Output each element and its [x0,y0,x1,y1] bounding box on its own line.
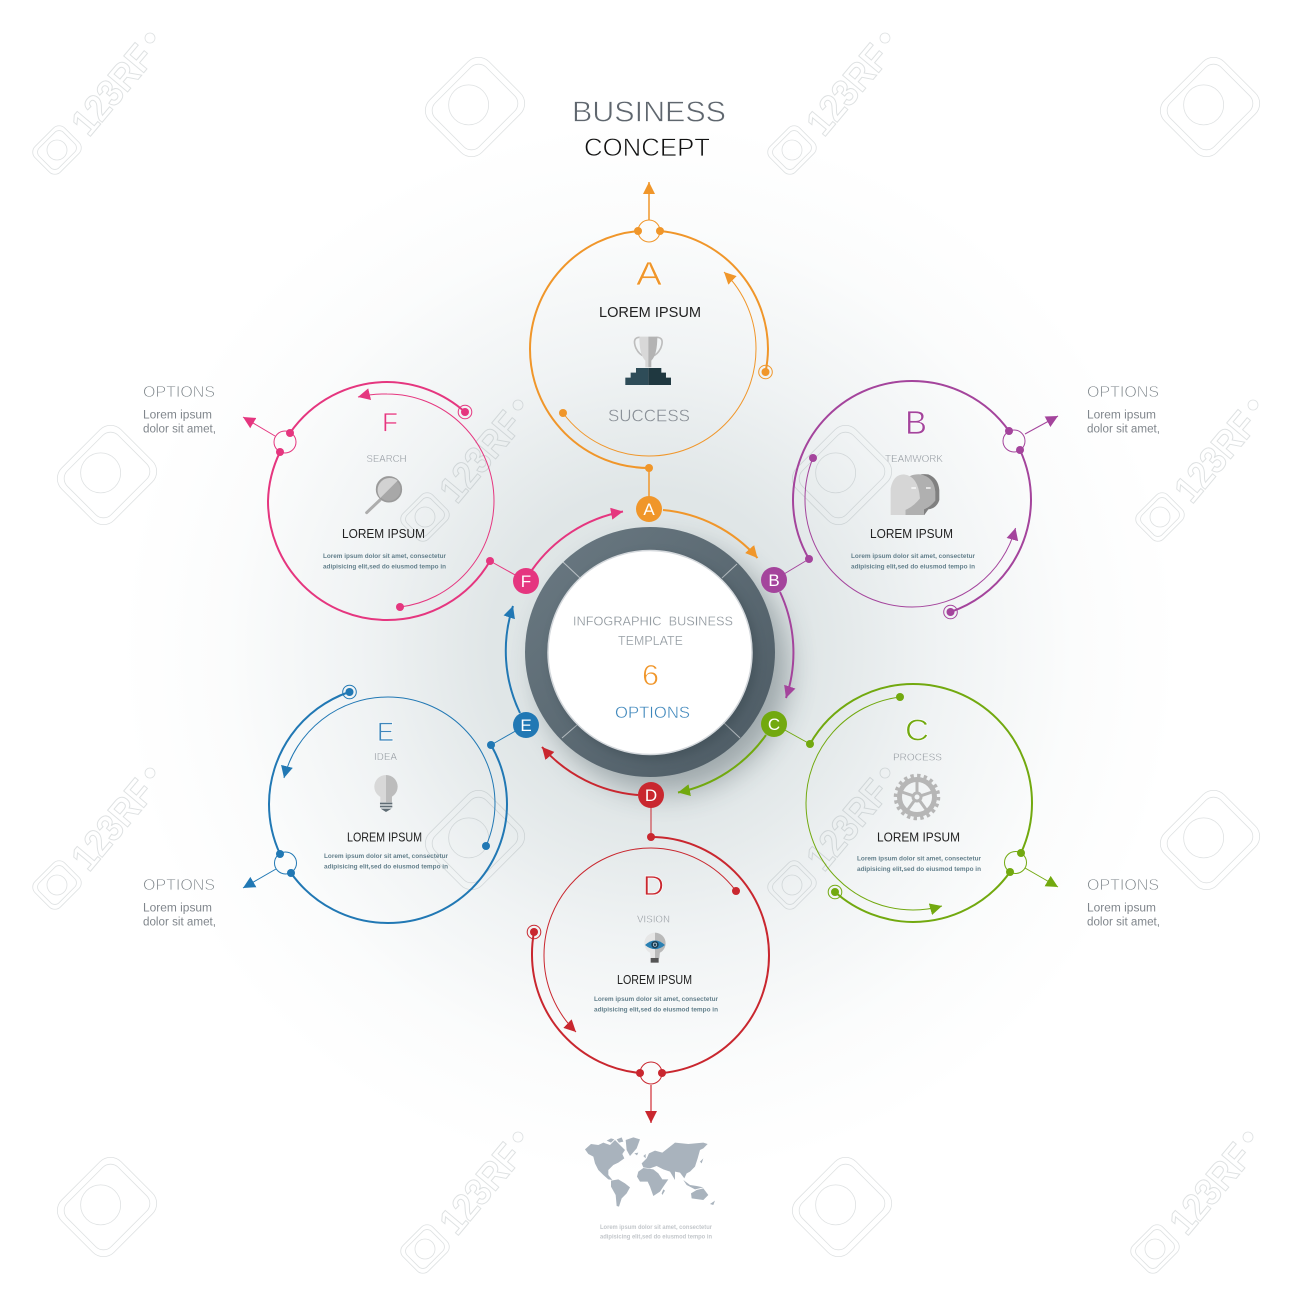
badge E [513,712,539,738]
options bottom right: dolor sit amet, [1087,916,1160,928]
options bottom left [143,877,216,928]
options bottom left: Lorem ipsum [143,902,212,914]
badge F [513,568,539,594]
panel B: teamwork: adipisicing elit,sed do eiusmod tempo in [851,564,975,570]
panel B: teamwork: TEAMWORK [885,453,943,465]
panel B: teamwork: LOREM IPSUM [870,527,953,541]
panel B: teamwork: B [905,404,927,441]
panel D: vision: D [643,870,664,901]
watermarks: 123RF [64,772,163,879]
panel A: success [530,182,772,497]
panel A: success: LOREM IPSUM [599,305,701,321]
watermarks: 123RF [1167,404,1266,511]
map caption: adipisicing elit,sed do eiusmod tempo in [600,1234,712,1240]
badge C: C [768,715,780,734]
badge B [761,567,787,593]
panel E: idea: adipisicing elit,sed do eiusmod tempo in [324,864,448,870]
panel C: process: C [905,712,929,748]
options top right: OPTIONS [1087,384,1159,401]
panel D: vision: adipisicing elit,sed do eiusmod tempo in [594,1006,718,1014]
options top right: Lorem ipsum [1087,410,1156,422]
map caption [600,1224,712,1240]
panel E: idea: LOREM IPSUM [347,830,422,844]
panel D: vision [527,796,769,1123]
options top right [1087,384,1160,436]
icon: magnifier [367,477,401,513]
panel F: search: Lorem ipsum dolor sit amet, consectetur [323,553,446,560]
panel A: success: A [636,255,662,292]
icon: gear [896,776,938,818]
badge D [638,782,664,808]
badge E: E [520,716,532,735]
hub text: TEMPLATE [618,633,683,648]
badge C [761,711,787,737]
hub text [573,614,733,722]
options bottom left: dolor sit amet, [143,916,216,928]
panel F: search: adipisicing elit,sed do eiusmod tempo in [323,564,446,570]
options bottom left: OPTIONS [143,877,215,894]
panel D: vision: VISION [637,914,670,926]
panel C: process: Lorem ipsum dolor sit amet, consectetur [857,856,981,862]
watermarks: 123RF [1162,1136,1261,1243]
map caption: Lorem ipsum dolor sit amet, consectetur [600,1224,712,1231]
panel C: process: PROCESS [893,752,942,764]
icon: two heads [891,474,939,515]
panel F: search: SEARCH [366,453,406,465]
hub text: OPTIONS [615,704,690,722]
ring of arrows between badges [506,510,793,795]
panel C: process: adipisicing elit,sed do eiusmod tempo in [857,866,981,873]
icon: trophy [625,337,671,385]
panel A: success: SUCCESS [608,406,690,426]
watermarks: 123RF [432,1136,531,1243]
panel D: vision: LOREM IPSUM [617,973,692,987]
badge A: A [643,500,655,519]
panel B: teamwork: Lorem ipsum dolor sit amet, consectetur [851,553,975,560]
panel F: search: F [382,408,398,438]
panel E: idea: Lorem ipsum dolor sit amet, consectetur [324,853,448,860]
badge F: F [521,572,531,591]
panel E: idea [243,685,526,923]
icon: eye in bulb [644,933,666,963]
title [572,96,726,162]
central hub [525,527,789,793]
hub text: INFOGRAPHIC BUSINESS [573,614,733,628]
panel D: vision: Lorem ipsum dolor sit amet, consectetur [594,996,718,1003]
panel E: idea: IDEA [374,751,397,763]
title: BUSINESS [572,96,726,128]
options top left: OPTIONS [143,384,215,401]
watermarks: 123RF [799,37,898,144]
options top right: dolor sit amet, [1087,424,1160,436]
options bottom right [1087,877,1160,928]
panel C: process: LOREM IPSUM [877,830,960,844]
watermarks: 123RF [799,772,898,879]
options top left: dolor sit amet, [143,424,216,436]
options bottom right: Lorem ipsum [1087,902,1156,914]
panel B: teamwork [774,381,1058,619]
panel E: idea: E [377,717,394,747]
panel C: process [774,684,1058,922]
hub text: 6 [642,660,659,692]
title: CONCEPT [584,134,710,162]
panel F: search [243,382,526,620]
badge D: D [645,786,657,805]
world map [585,1137,715,1207]
watermarks: 123RF [64,37,163,144]
options top left: Lorem ipsum [143,410,212,422]
options top left [143,384,216,436]
options bottom right: OPTIONS [1087,877,1159,894]
panel F: search: LOREM IPSUM [342,527,425,541]
badge B: B [768,571,780,590]
watermarks: 123RF [432,404,531,511]
icon: light bulb [374,775,398,812]
badge A [636,496,662,522]
